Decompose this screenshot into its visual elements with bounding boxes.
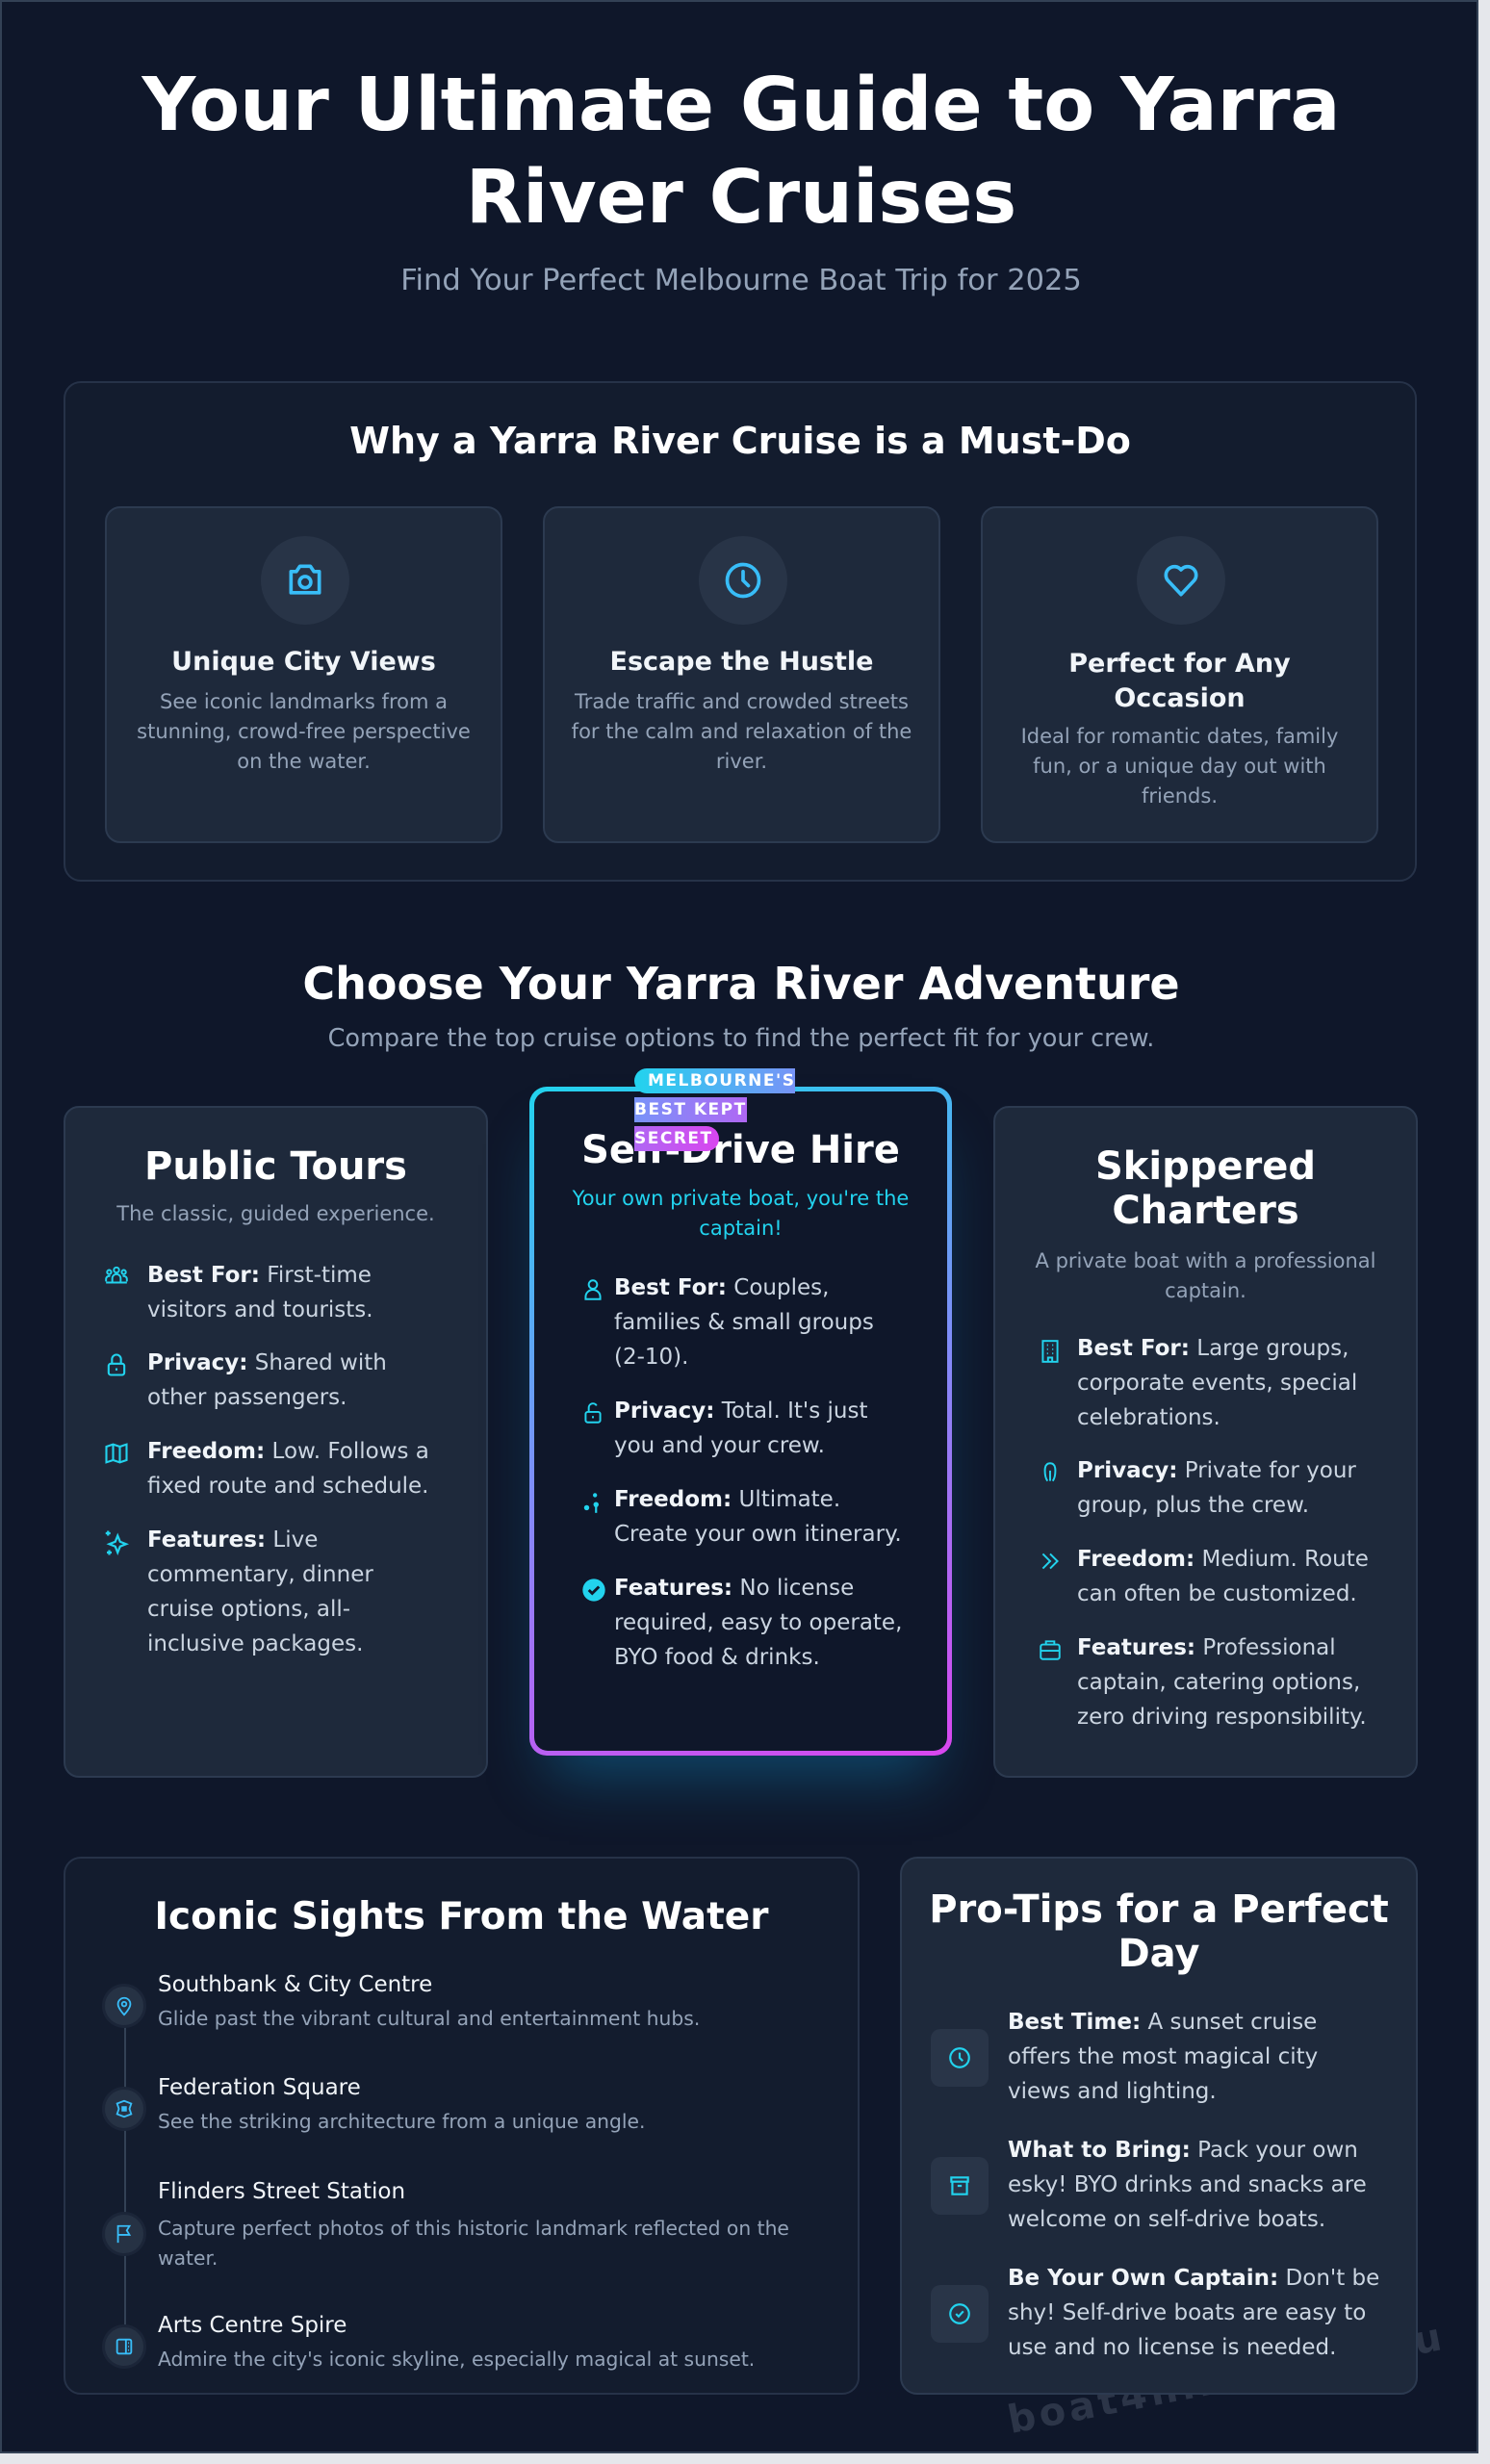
panel: why a cruise — [64, 381, 1417, 882]
tip: captain: Be Your Own Captain: Don't be shy! Self-drive boats are easy to use and no license is needed. — [1008, 2266, 1379, 2360]
item: features — [582, 1576, 902, 1670]
icon: clock — [699, 536, 787, 625]
watermark: boat4hire.com.au — [1004, 2315, 1449, 2443]
card: escape the hustle — [543, 506, 940, 843]
sight: federation square: See the striking architecture from a unique angle. — [158, 2110, 645, 2133]
card: unique city views — [105, 506, 502, 843]
item: privacy — [108, 1350, 387, 1410]
heading: choose adventure: Choose Your Yarra River Adventure — [302, 958, 1180, 1010]
sight: southbank — [102, 1972, 700, 2030]
icon: clock — [931, 2029, 989, 2087]
item: freedom — [105, 1439, 429, 1499]
sight: arts centre — [102, 2313, 755, 2371]
card title: Perfect for Any — [1068, 649, 1291, 679]
panel: iconic sights — [64, 1857, 860, 2395]
list — [105, 1263, 429, 1656]
tip: what to bring: What to Bring: Pack your own esky! BYO drinks and snacks are welcome on self-drive boats. — [1008, 2138, 1367, 2232]
item: best for — [1041, 1336, 1357, 1430]
title: Self-Drive Hire — [581, 1128, 900, 1172]
item: features — [1040, 1635, 1367, 1730]
title: Public Tours — [144, 1144, 407, 1189]
icon: camera — [261, 536, 349, 625]
item: best for — [584, 1275, 874, 1370]
card title: Unique City Views — [171, 647, 436, 677]
title: Skippered — [1095, 1144, 1316, 1189]
list: Best For: First-time visitors and tourists. — [147, 1263, 373, 1322]
subtitle: Your own private boat, you're the captain! — [573, 1187, 909, 1240]
sight: flinders street — [102, 2179, 789, 2270]
card text: Ideal for romantic dates, family fun, or a unique day out with friends. — [1021, 725, 1338, 808]
list: Privacy: Shared with other passengers. — [147, 1350, 387, 1410]
list: Features: No license required, easy to operate, BYO food & drinks. — [614, 1576, 902, 1670]
list: Freedom: Medium. Route can often be customized. — [1077, 1547, 1369, 1606]
item: freedom — [583, 1487, 902, 1547]
list — [582, 1275, 902, 1670]
title — [1095, 1144, 1316, 1233]
icon: heart — [1137, 536, 1225, 625]
list: Privacy: Private for your group, plus the crew. — [1077, 1458, 1356, 1518]
card title — [1068, 649, 1291, 713]
title: Your Ultimate Guide to Yarra — [142, 63, 1340, 148]
card: public tours — [64, 1106, 488, 1778]
list: Freedom: Low. Follows a fixed route and schedule. — [147, 1439, 429, 1499]
sight: southbank: Southbank & City Centre — [158, 1972, 432, 1997]
panel: pro-tips — [900, 1857, 1418, 2395]
heading: why: Why a Yarra River Cruise is a Must-Do — [349, 420, 1131, 462]
list: Features: Professional captain, catering options, zero driving responsibility. — [1077, 1635, 1367, 1730]
sight: flinders street: Capture perfect photos of this historic landmark reflected on the water. — [158, 2217, 789, 2270]
list: Features: Live commentary, dinner cruise options, all-inclusive packages. — [147, 1527, 373, 1656]
subtitle: A private boat with a professional captain. — [1036, 1249, 1375, 1302]
card: self-drive hire (featured) — [529, 1087, 952, 1756]
icon: box — [931, 2157, 989, 2215]
item: features — [106, 1527, 373, 1656]
subheading: Compare the top cruise options to find the perfect fit for your crew. — [328, 1024, 1154, 1053]
list: Freedom: Ultimate. Create your own itinerary. — [614, 1487, 902, 1547]
list — [1040, 1336, 1369, 1730]
list: Best For: Large groups, corporate events, special celebrations. — [1077, 1336, 1357, 1430]
item: privacy — [584, 1399, 867, 1458]
card text: Trade traffic and crowded streets for the calm and relaxation of the river. — [572, 690, 912, 773]
item: freedom — [1041, 1547, 1369, 1606]
title: Charters — [1112, 1189, 1299, 1233]
card: any occasion — [981, 506, 1378, 843]
title: River Cruises — [466, 155, 1016, 241]
sight: southbank: Glide past the vibrant cultural and entertainment hubs. — [158, 2007, 700, 2030]
title — [141, 63, 1340, 241]
badge: best kept secret: MELBOURNE'S BEST KEPT SECRET — [634, 1071, 795, 1148]
icon: architecture — [102, 2087, 146, 2131]
list: Best For: Couples, families & small groups (2-10). — [614, 1275, 874, 1370]
icon: flag — [102, 2212, 146, 2256]
timeline line — [124, 2008, 126, 2345]
heading: pro-tips: Pro-Tips for a Perfect Day — [929, 1887, 1389, 1976]
sight: arts centre: Arts Centre Spire — [158, 2313, 347, 2338]
icon: check — [931, 2285, 989, 2343]
icon: pin — [102, 1984, 146, 2028]
card title: Occasion — [1114, 683, 1246, 713]
card: skippered charters — [993, 1106, 1418, 1778]
item: privacy — [1043, 1458, 1356, 1518]
sight: arts centre: Admire the city's iconic skyline, especially magical at sunset. — [158, 2348, 755, 2371]
list: Privacy: Total. It's just you and your crew. — [614, 1399, 867, 1458]
icon: building — [102, 2324, 146, 2369]
subtitle: The classic, guided experience. — [116, 1202, 435, 1225]
tip: best time: Best Time: A sunset cruise offers the most magical city views and lighting. — [1008, 2010, 1318, 2104]
sight: federation square: Federation Square — [158, 2075, 361, 2100]
item: best for — [105, 1263, 373, 1322]
card title: Escape the Hustle — [610, 647, 873, 677]
sight: federation square — [102, 2075, 645, 2133]
subtitle: Find Your Perfect Melbourne Boat Trip for 2025 — [400, 264, 1082, 297]
card text: See iconic landmarks from a stunning, crowd-free perspective on the water. — [137, 690, 471, 773]
heading: sights: Iconic Sights From the Water — [155, 1895, 768, 1938]
sight: flinders street: Flinders Street Station — [158, 2179, 405, 2204]
